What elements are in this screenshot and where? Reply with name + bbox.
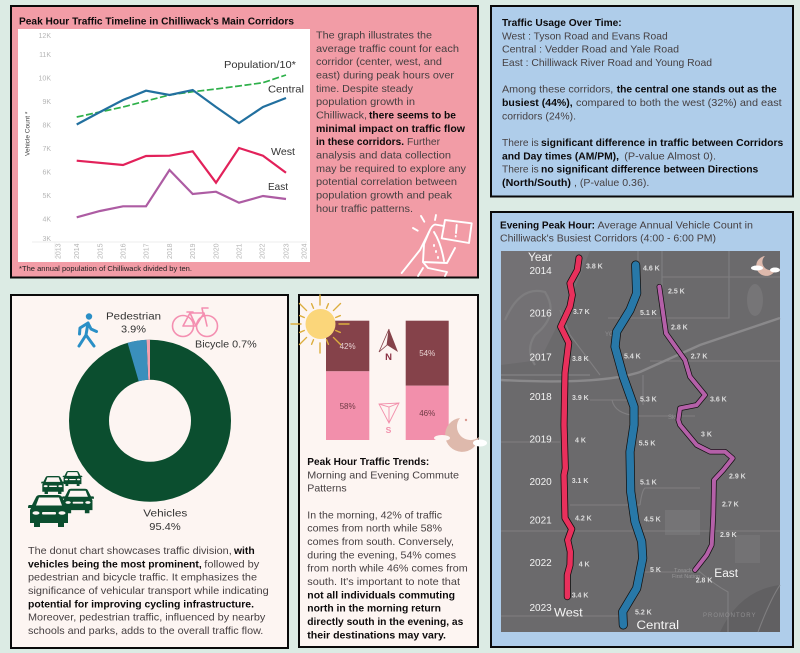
bar: evening split: 46% (419, 409, 435, 418)
west values: 4 K (575, 438, 586, 445)
line chart: vehicle count by corridor: 7K (42, 146, 51, 153)
text block: donut explanation: The donut chart showcases traffic division, (28, 545, 232, 557)
icon: south arrow (379, 403, 399, 435)
bar: morning split: 58% (340, 402, 356, 411)
text block: trends explanation: In the morning, 42% of traffic (307, 509, 442, 521)
text block: trends explanation: from north while 46% comes from (307, 563, 468, 575)
year labels: 2019 (530, 434, 552, 445)
line chart: vehicle count by corridor: 9K (42, 99, 51, 106)
text block: trends explanation: Morning and Evening Commute (307, 469, 459, 481)
text block: trends explanation: Peak Hour Traffic Trends: (307, 456, 429, 468)
panel: traffic usage over time: significant difference in traffic between Corridors (541, 137, 783, 149)
panel: traffic usage over time: Central : Vedder Road and Yale Road (502, 44, 679, 56)
donut chart (89, 340, 211, 482)
line chart: vehicle count by corridor: 2015 (98, 243, 104, 259)
west values: 3.7 K (573, 309, 590, 316)
icon: pedestrian (79, 313, 96, 346)
panel: traffic usage over time: , (P-value 0.36). (574, 177, 649, 189)
text block: donut explanation (28, 545, 269, 637)
text block: donut explanation: with (233, 545, 255, 557)
corridor name labels: Central (636, 620, 679, 632)
text block: trends explanation: during the evening, 54% comes (307, 549, 456, 561)
year labels: 2017 (530, 353, 552, 364)
central values: 4.5 K (644, 516, 661, 523)
panel: traffic mode share donut (11, 295, 288, 648)
text block: trends explanation: Patterns (307, 483, 347, 495)
year labels: 2014 (530, 266, 552, 277)
text block: timeline explanation: may be required to explore any (316, 163, 467, 175)
west values: 3.8 K (572, 356, 589, 363)
panel: peak hour traffic trends (291, 295, 487, 647)
text block: timeline explanation: time. Despite steady (316, 83, 414, 95)
map: corridor routes: PROMONTORY (703, 613, 756, 619)
bar: evening split: 54% (419, 349, 435, 358)
line chart: vehicle count by corridor: East (268, 181, 288, 193)
line chart: vehicle count by corridor: 11K (39, 52, 51, 59)
label: pedestrian: 3.9% (121, 323, 146, 335)
panel: traffic usage over time: and Day times (AM/PM), (502, 150, 619, 162)
icon: bicycle (172, 308, 218, 336)
west values: 3.9 K (572, 395, 589, 402)
text block: trends explanation: north in the morning return (307, 603, 441, 615)
east values: 2.5 K (668, 288, 685, 295)
panel: traffic usage over time: (North/South) (502, 177, 571, 189)
central values: 5.1 K (640, 310, 657, 317)
west values (572, 263, 603, 599)
label: bicycle: Bicycle 0.7% (195, 338, 257, 350)
label: vehicles: Vehicles (143, 508, 187, 520)
text block: timeline explanation: population growth and peak (316, 190, 453, 202)
west values: 4 K (579, 562, 590, 569)
text block: timeline explanation: potential correlation between (316, 176, 457, 188)
panel: traffic usage over time: busiest (44%), (502, 97, 573, 109)
text block: donut explanation: Moreover, pedestrian traffic, influenced by nearby (28, 612, 266, 624)
panel: traffic usage over time: West : Tyson Road and Evans Road (502, 30, 668, 42)
icon: hand holding phone (402, 215, 472, 276)
line chart: vehicle count by corridor: 2014 (74, 243, 81, 259)
text block: trends explanation (307, 456, 468, 641)
heading: evening peak hour: Evening Peak Hour: (500, 219, 595, 231)
east values: 2.8 K (696, 577, 712, 584)
west values: 3.4 K (572, 592, 588, 599)
heading: evening peak hour: Average Annual Vehicle Count in (598, 219, 753, 231)
text block: timeline explanation: Further (407, 136, 440, 148)
east values: 2.9 K (720, 532, 737, 539)
text block: trends explanation: not all individuals commuting (307, 589, 455, 601)
central values: 5.4 K (624, 353, 641, 360)
route: west (561, 258, 579, 597)
line chart: vehicle count by corridor: 2021 (236, 243, 244, 259)
corridor name labels (554, 568, 739, 632)
line chart: vehicle count by corridor: 2018 (167, 243, 174, 259)
map: corridor routes: First Nation (672, 574, 700, 580)
panel: traffic usage over time: corridors (24%). (502, 110, 576, 122)
year labels (528, 252, 552, 614)
central values: 4.6 K (643, 266, 660, 273)
text block: timeline explanation: The graph illustrates the (316, 30, 432, 42)
label: pedestrian: Pedestrian (106, 310, 161, 322)
line chart: vehicle count by corridor (18, 29, 310, 262)
map: corridor routes: Tzeachten (674, 568, 700, 574)
text block: timeline explanation: average traffic count for each (316, 43, 459, 55)
year labels: 2022 (530, 558, 552, 569)
corridor name labels: West (554, 608, 584, 620)
label: vehicles (143, 508, 187, 533)
central values: 5.2 K (635, 609, 652, 616)
panel: evening peak hour map (491, 212, 793, 647)
icon: moon and clouds (434, 418, 487, 452)
central values: 5.3 K (640, 397, 657, 404)
text block: timeline explanation: corridor (center, west, and (316, 56, 442, 68)
corridor name labels: East (714, 568, 739, 580)
map: corridor routes: YCW (605, 332, 619, 338)
line chart: vehicle count by corridor: 8K (42, 122, 51, 130)
panel: traffic usage over time (491, 6, 793, 196)
east values: 3 K (701, 432, 712, 439)
line chart: vehicle count by corridor: Population/10* (224, 59, 296, 71)
year labels: 2018 (530, 392, 552, 403)
year labels: 2021 (530, 516, 552, 527)
central values (624, 266, 661, 616)
text block: donut explanation: vehicles being the most prominent, (28, 558, 202, 570)
text block: donut explanation: significance of vehicular transport while indicating (28, 585, 269, 597)
line chart: vehicle count by corridor: 2024 (302, 243, 308, 259)
icon: cars (28, 471, 94, 527)
text block: timeline explanation: minimal impact on traffic flow (316, 123, 466, 135)
text block: timeline explanation: there seems to be (369, 110, 456, 122)
east values: 2.9 K (729, 473, 746, 480)
map: corridor routes (501, 251, 780, 632)
panel: traffic usage over time: no significant difference between Directions (541, 164, 758, 176)
footnote: *The annual population of Chilliwack divided by ten. (19, 266, 192, 273)
text block: trends explanation: south. It's important to note that (307, 576, 460, 588)
east values: 2.7 K (691, 353, 707, 360)
icon: sun (291, 295, 349, 353)
central values: 5 K (650, 567, 661, 574)
line chart: vehicle count by corridor: 2016 (120, 243, 128, 259)
central values: 5.5 K (639, 441, 655, 448)
label: pedestrian (106, 310, 161, 335)
icon: north arrow: N (385, 352, 392, 363)
icon: south arrow: S (386, 425, 392, 435)
map: corridor routes: Sk (668, 415, 676, 421)
line chart: vehicle count by corridor: 5K (42, 193, 51, 200)
line chart: vehicle count by corridor: 4K (42, 216, 51, 224)
heading: evening peak hour (500, 219, 753, 245)
text block: trends explanation: comes from north while 58% (307, 523, 442, 535)
panel: traffic usage over time: Among these corridors, (502, 84, 613, 96)
route: east (659, 287, 733, 570)
line chart: vehicle count by corridor: 2022 (260, 243, 266, 259)
line chart: vehicle count by corridor: 6K (42, 170, 51, 176)
year labels: 2016 (530, 309, 552, 320)
east values: 2.8 K (671, 324, 688, 331)
text block: donut explanation: potential for improving cycling infrastructure. (28, 598, 254, 610)
year labels: 2023 (530, 603, 552, 614)
bar: morning split (326, 321, 369, 440)
line chart: vehicle count by corridor: 2017 (144, 243, 150, 259)
east values: 3.6 K (710, 397, 727, 404)
text block: trends explanation: comes from south. Conversely, (307, 536, 454, 548)
panel: traffic usage over time: (P-value Almost 0). (624, 150, 716, 162)
text block: timeline explanation: analysis and data collection (316, 150, 451, 162)
text block: timeline explanation: hour traffic patterns. (316, 203, 413, 215)
text block: trends explanation: directly south in the evening, as (307, 616, 463, 628)
line chart: vehicle count by corridor: 12K (39, 33, 51, 40)
line chart: vehicle count by corridor: 2020 (214, 243, 220, 259)
year labels: Year (528, 252, 552, 264)
year labels: 2020 (530, 477, 552, 488)
heading: evening peak hour: Chilliwack's Busiest Corridors (4:00 - 6:00 PM) (500, 233, 716, 245)
panel: peak hour traffic timeline (11, 6, 478, 278)
panel: traffic usage over time: There is (502, 137, 539, 149)
line chart: vehicle count by corridor: Vehicle Count * (24, 111, 32, 156)
text block: timeline explanation: east) during peak hours over (316, 70, 455, 82)
line chart: vehicle count by corridor: 10K (39, 76, 51, 82)
line chart: vehicle count by corridor: 2023 (284, 243, 290, 259)
panel: traffic usage over time: There is (502, 164, 539, 176)
east values: 2.7 K (722, 502, 739, 509)
west values: 3.8 K (586, 263, 603, 270)
label: vehicles: 95.4% (149, 521, 181, 533)
line chart: vehicle count by corridor: 3K (42, 236, 51, 243)
text block: trends explanation: their destinations may vary. (307, 629, 446, 641)
icon: north arrow (379, 329, 398, 363)
line chart: vehicle count by corridor: Central (268, 84, 304, 96)
line chart: vehicle count by corridor: 2013 (56, 243, 62, 259)
text block: timeline explanation: Chilliwack, (316, 110, 367, 122)
line chart: vehicle count by corridor: 2019 (190, 243, 197, 259)
heading: timeline title: Peak Hour Traffic Timeline in Chilliwack's Main Corridors (19, 16, 294, 28)
text block: donut explanation: pedestrian and bicycle traffic. It emphasizes the (28, 572, 257, 584)
central values: 5.1 K (640, 479, 657, 486)
panel: traffic usage over time: East : Chilliwack River Road and Young Road (502, 57, 712, 69)
bar: evening split (406, 321, 449, 440)
east values (668, 288, 746, 584)
text block: timeline explanation: population growth in (316, 96, 415, 108)
panel: traffic usage over time: Traffic Usage Over Time: (502, 17, 622, 29)
route: central (615, 265, 643, 625)
text block: timeline explanation: in these corridors. (316, 136, 404, 148)
panel: traffic usage over time: compared to both the west (32%) and east (576, 97, 782, 109)
text block: timeline explanation (316, 30, 467, 215)
text block: donut explanation: schools and parks, adds to the overall traffic flow. (28, 625, 263, 637)
west values: 3.1 K (572, 478, 588, 485)
line chart: vehicle count by corridor: West (271, 146, 295, 158)
panel: traffic usage over time: the central one stands out as the (617, 84, 777, 96)
icon: moon and clouds (751, 256, 780, 276)
west values: 4.2 K (575, 516, 592, 523)
bar: morning split: 42% (340, 342, 356, 351)
text block: donut explanation: followed by (204, 558, 260, 570)
